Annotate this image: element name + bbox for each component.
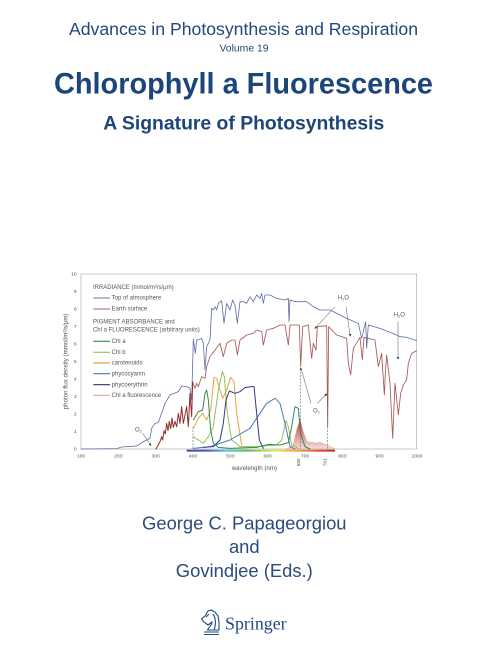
x axis tick labels: 100 (77, 454, 85, 460)
y axis tick labels: 9 (74, 289, 77, 295)
legend (93, 285, 200, 399)
publisher name: Springer (225, 613, 287, 633)
x axis tick labels: 600 (264, 454, 272, 460)
y axis tick labels: 8 (74, 307, 77, 313)
legend: Earth surface (112, 307, 148, 313)
legend: Top of atmosphere (112, 296, 162, 302)
legend: phycocyanin (112, 371, 145, 377)
and: and (229, 536, 260, 557)
y axis tick labels (71, 272, 77, 453)
chl a curve (193, 390, 310, 449)
icon: springer knight (202, 610, 219, 634)
y axis tick labels: 1 (74, 429, 77, 435)
x axis tick labels: 300 (152, 454, 160, 460)
y axis tick labels: 6 (74, 342, 77, 348)
legend: phycoerythrin (112, 382, 148, 388)
legend: Chl a fluorescence (112, 393, 162, 399)
top of atmosphere curve (81, 293, 417, 449)
x axis tick labels: 700 (301, 454, 309, 460)
gas absorption labels: O (400, 312, 405, 318)
gas absorption labels: 2 (398, 314, 400, 318)
main title: Chlorophyll a Fluorescence (54, 67, 433, 100)
legend: Chl a FLUORESCENCE (arbitrary units) (93, 327, 200, 333)
legend: carotenoids (112, 361, 143, 367)
volume number: Volume 19 (219, 44, 269, 54)
x axis tick labels: 400 (189, 454, 197, 460)
legend: PIGMENT ABSORBANCE and (93, 320, 175, 326)
spectrum colour bar (187, 450, 335, 452)
phycocyanin curve (193, 398, 295, 449)
subtitle: A Signature of Photosynthesis (103, 112, 384, 134)
gas absorption labels: O (313, 408, 318, 414)
earth surface curve (156, 382, 193, 449)
y axis tick labels: 4 (74, 377, 77, 383)
spectrum chart (63, 272, 423, 472)
y axis tick labels: 0 (74, 447, 77, 453)
phycoerythrin curve (203, 387, 263, 448)
dashed guide lines (193, 368, 328, 449)
legend: Chl b (112, 350, 126, 356)
x axis tick labels: 200 (114, 454, 123, 460)
y axis tick labels: 2 (74, 412, 77, 418)
chl a fluorescence curve (287, 419, 335, 449)
685 and 761 labels: 685 (296, 458, 301, 466)
y axis tick labels: 7 (74, 324, 77, 330)
gas absorption labels: 2 (318, 410, 320, 414)
y axis tick labels: 10 (71, 272, 77, 278)
plot frame (81, 274, 417, 449)
x axis tick labels: 800 (338, 454, 347, 460)
x axis tick labels: 900 (375, 454, 384, 460)
annotation arrows (143, 307, 398, 445)
series title: Advances in Photosynthesis and Respiration (69, 19, 418, 39)
legend: IRRADIANCE (mmol/m²/s/μm) (93, 285, 174, 291)
gas absorption labels: O (344, 296, 349, 302)
editor: Govindjee: Govindjee (Eds.) (176, 560, 313, 581)
x axis title: wavelength (nm) (231, 465, 277, 472)
carotenoids curve (193, 377, 242, 445)
gas absorption labels: 2 (342, 298, 344, 302)
spectrum chart: 761 (323, 458, 328, 466)
gas absorption labels (135, 296, 405, 434)
gas absorption labels: O (135, 428, 140, 434)
gas absorption labels: H (338, 296, 342, 302)
x axis tick labels: 1000 (411, 454, 423, 460)
chl b curve (193, 372, 298, 448)
x axis tick labels: 500 (226, 454, 235, 460)
x axis tick labels (77, 454, 423, 460)
gas absorption labels: H (394, 312, 398, 318)
gas absorption labels: 3 (140, 430, 142, 434)
y axis title: photon flux density (mmol/m²/s/μm) (63, 313, 70, 409)
editor: George C. Papageorgiou: George C. Papageorgiou (142, 512, 347, 533)
y axis tick labels: 3 (74, 394, 77, 400)
legend: Chl a (112, 339, 126, 345)
y axis tick labels: 5 (74, 359, 77, 365)
